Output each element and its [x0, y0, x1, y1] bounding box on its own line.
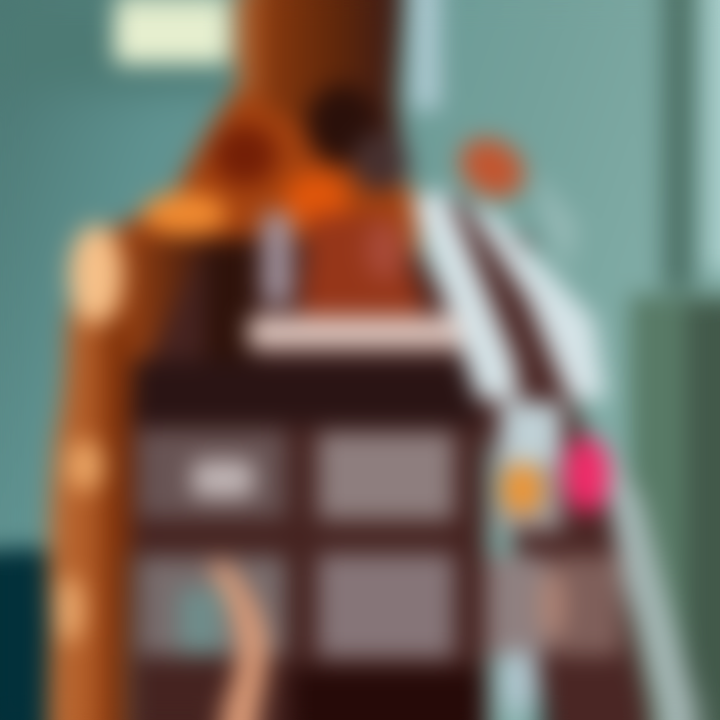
cell label: [192, 460, 254, 498]
arm highlights: [55, 225, 127, 720]
figure: shoulders and trapezius: [105, 85, 420, 320]
orange marker: [501, 463, 543, 515]
white fan of rays on the right shoulder: [410, 170, 700, 720]
pale edge behind the neck: [412, 0, 440, 110]
heading: blurred title bar: [248, 316, 460, 349]
table cell: top right: [496, 402, 562, 530]
peach arc: [208, 558, 268, 720]
table cell: bottom right: [486, 556, 548, 656]
pale marker below the table: [500, 652, 538, 710]
figure: torso: [130, 215, 488, 720]
figure: head and neck: [232, 0, 412, 190]
table cell: bottom middle: [318, 554, 454, 658]
figure: left arm: [48, 230, 215, 720]
figure: right shoulder and arm: [440, 126, 650, 720]
table cell: far right: [538, 556, 622, 656]
table cell: top middle: [318, 432, 454, 520]
vertical pale bar: [262, 212, 292, 304]
table cell: top left: [138, 430, 286, 518]
table cell: bottom left: [138, 556, 286, 656]
ceiling light: [114, 2, 230, 64]
pink marker: [564, 437, 610, 513]
